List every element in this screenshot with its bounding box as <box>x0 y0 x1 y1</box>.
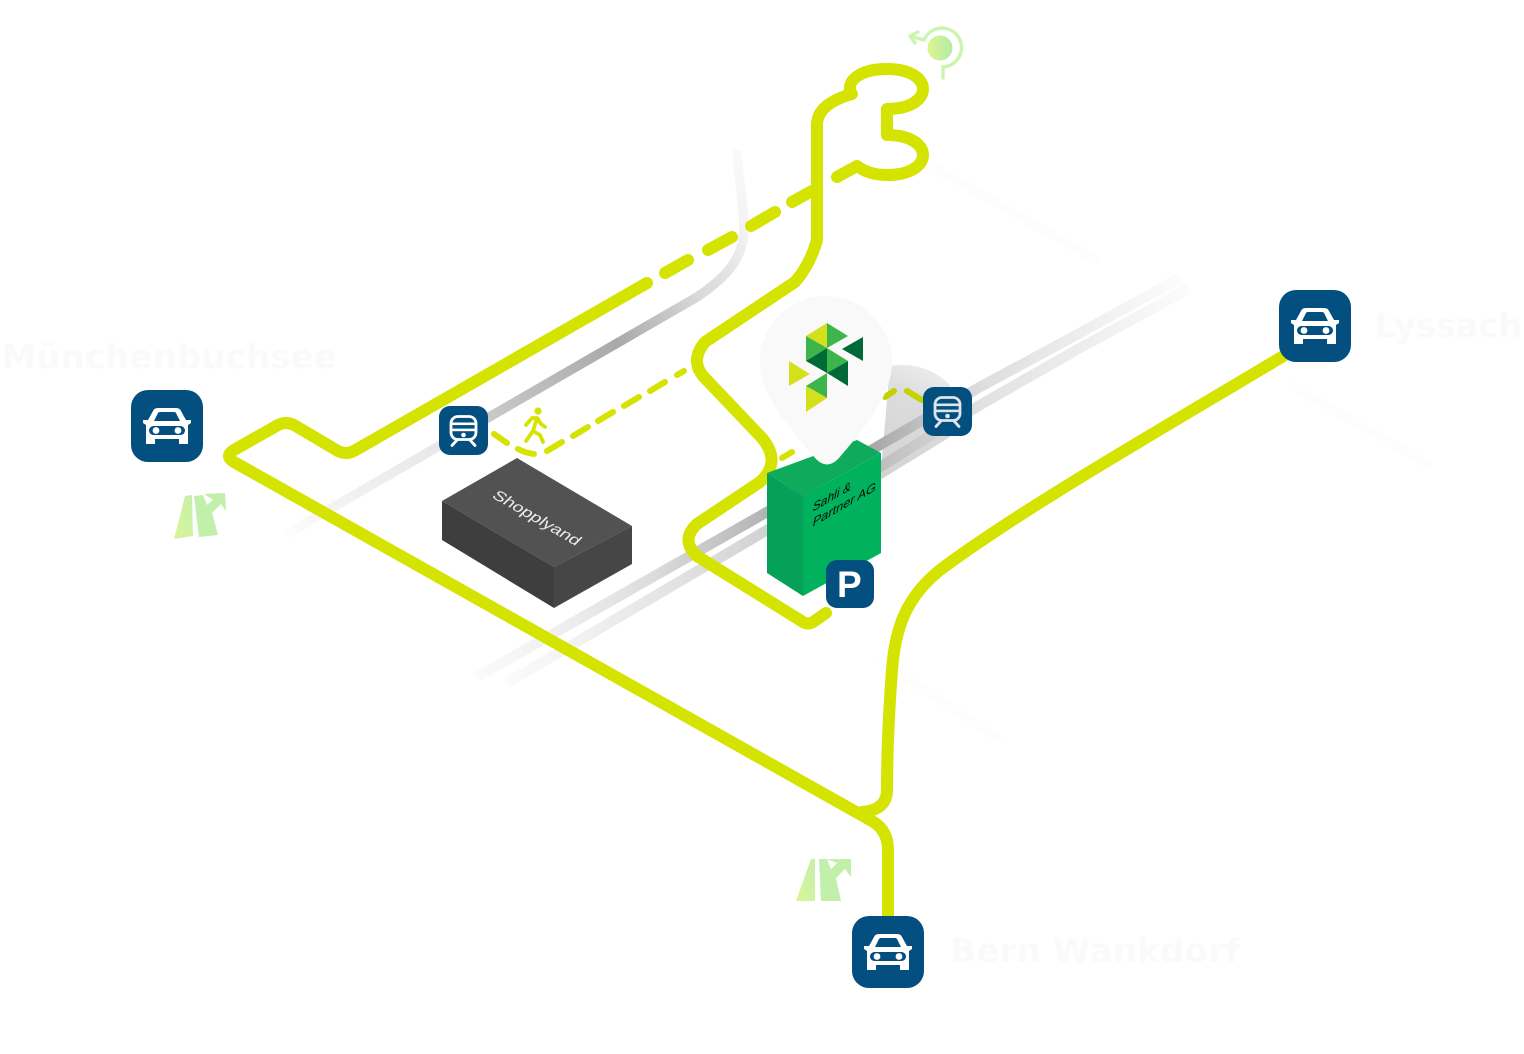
road: access to the building <box>688 69 923 624</box>
icon: car Lyssach <box>1279 290 1351 362</box>
road: from Lyssach <box>862 355 1285 812</box>
label: Münchenbuchsee: Münchenbuchsee <box>2 337 337 376</box>
road: main from Bern to Münchenbuchsee <box>229 283 888 916</box>
faint background streets <box>880 168 1430 740</box>
icon: car Münchenbuchsee <box>131 390 203 462</box>
building: Shopplyand <box>442 458 632 608</box>
label: Bern Wankdorf: Bern Wankdorf <box>950 931 1241 970</box>
icon: roundabout <box>910 28 961 78</box>
label: Shopplyand: Shopplyand <box>488 488 585 549</box>
footpath: dashes from station to building <box>494 371 922 458</box>
pin with logo <box>760 296 892 464</box>
railway: upper track <box>477 278 1180 677</box>
icon: train station east <box>923 387 972 436</box>
label: company name: Sahli & <box>811 478 852 515</box>
label: Lyssach: Lyssach <box>1375 306 1522 345</box>
building shadow <box>880 365 950 480</box>
icon: car Bern Wankdorf <box>852 916 924 988</box>
icon: motorway exit west <box>174 493 226 539</box>
road: dashed link <box>665 191 812 273</box>
label: company name: Partner AG <box>811 479 878 530</box>
railway: lower track <box>507 288 1190 683</box>
building: Sahli & Partner AG <box>767 440 881 596</box>
icon: train station west <box>439 406 488 455</box>
icon: pedestrian <box>526 407 545 442</box>
icon: motorway exit south <box>796 859 851 901</box>
icon: parking <box>826 560 874 608</box>
icon: parking: P <box>837 564 862 605</box>
railway: curved track <box>285 150 744 535</box>
logo <box>789 323 863 412</box>
